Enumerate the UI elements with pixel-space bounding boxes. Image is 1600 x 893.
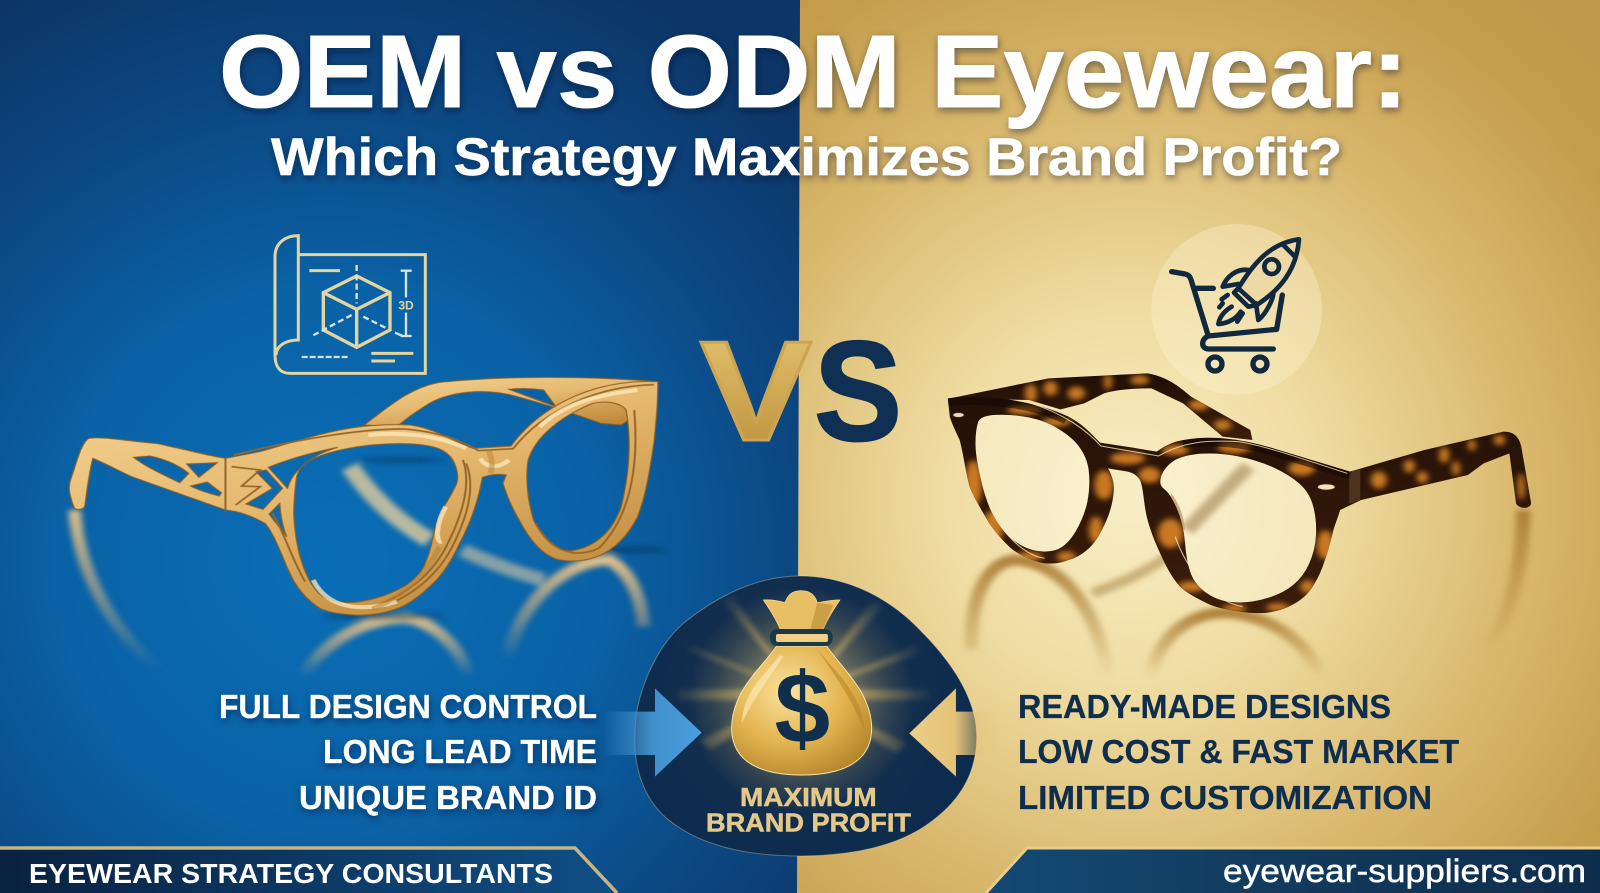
VS badge: [700, 312, 902, 471]
main frame: [69, 381, 658, 615]
lens shadow: [1187, 467, 1248, 530]
money glow rays: [677, 595, 928, 753]
S letter: S: [814, 312, 902, 471]
background: blue OEM side: [0, 0, 800, 893]
far temple tortoise: [950, 373, 1252, 440]
hinge details: [225, 385, 654, 510]
icon: shopping cart with rocket: [1151, 224, 1322, 395]
rim contour lines: [272, 410, 635, 607]
ODM features list: READY-MADE DESIGNS: [1018, 688, 1391, 725]
far temple: [364, 377, 658, 427]
bag neck ruffle: [763, 591, 840, 631]
subtitle: Which Strategy Maximizes Brand Profit?: [271, 128, 1342, 187]
gold glasses reflection: [74, 457, 666, 677]
title: [219, 14, 1408, 187]
lenses: [975, 415, 1316, 602]
ODM features list: [1018, 688, 1459, 816]
cart: [1172, 272, 1282, 371]
footer left text: EYEWEAR STRATEGY CONSULTANTS: [29, 858, 553, 889]
OEM features list: FULL DESIGN CONTROL: [219, 688, 597, 725]
tortoise ODM glasses: [948, 373, 1532, 614]
gold OEM glasses: [69, 377, 658, 615]
ODM features list: LOW COST & FAST MARKET: [1018, 733, 1459, 770]
medallion shape: [635, 576, 977, 856]
bag body: [732, 646, 872, 775]
frame highlights: [313, 390, 638, 607]
dollar sign: $: [775, 653, 830, 765]
icon halo circle: [1151, 224, 1322, 395]
OEM features list: UNIQUE BRAND ID: [299, 779, 597, 816]
icon: money bag: [732, 591, 872, 775]
bag tie band: [770, 629, 833, 646]
frame highlights: [987, 403, 1347, 607]
footer right: website banner: [986, 848, 1600, 893]
ODM features list: LIMITED CUSTOMIZATION: [1018, 779, 1432, 816]
icon: 3D blueprint: [275, 236, 425, 373]
OEM features list: [219, 688, 597, 816]
rocket: [1218, 239, 1299, 324]
V letter: V: [700, 312, 812, 471]
medallion caption: BRAND PROFIT: [706, 808, 911, 838]
panel: maximum brand profit medallion: [603, 576, 1000, 856]
footer left: consultants banner: [0, 848, 617, 893]
medallion caption: MAXIMUM: [740, 782, 877, 812]
icon: 3D blueprint: 3D: [398, 298, 414, 312]
OEM features list: LONG LEAD TIME: [323, 733, 597, 770]
glow halo: [688, 587, 915, 813]
tortoise frame front and temple: [948, 397, 1532, 614]
rivets: [953, 413, 964, 417]
bag fold highlights: [817, 648, 865, 733]
arrow: OEM into profit: [603, 688, 702, 777]
title: OEM vs ODM Eyewear:: [219, 14, 1408, 129]
medallion caption: [706, 782, 911, 838]
nose pad: [1169, 493, 1185, 530]
background: gold ODM side: [797, 0, 1600, 893]
footer right text: eyewear-suppliers.com: [1223, 853, 1586, 889]
arrow: ODM into profit: [909, 688, 1000, 777]
tortoise glasses reflection: [971, 510, 1523, 677]
